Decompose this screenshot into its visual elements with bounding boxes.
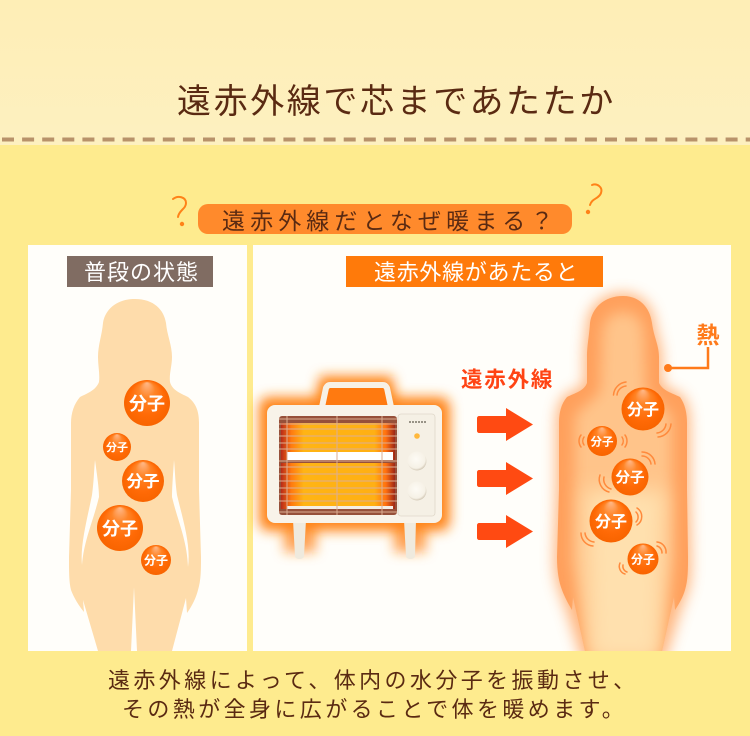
explanation line 2: その熱が全身に広がることで体を暖めます。 — [122, 697, 627, 722]
molecule 5: 分子 — [144, 554, 168, 568]
molecule 3 with vibration: 分子 — [616, 470, 644, 486]
panel heading: normal state — [67, 256, 213, 287]
molecule 2 with vibration — [579, 426, 627, 456]
molecule 5 with vibration: 分子 — [631, 552, 655, 566]
molecule 2: 分子 — [106, 440, 128, 454]
panel heading: under far infrared: 遠赤外線があたると — [374, 260, 578, 285]
heater element grille — [279, 416, 397, 515]
molecule 5 — [141, 545, 171, 575]
panel heading: normal state: 普段の状態 — [84, 260, 199, 285]
molecule 1: 分子 — [129, 394, 165, 414]
question heading text: 遠赤外線だとなぜ暖まる？ — [222, 208, 559, 234]
heat callout — [664, 322, 720, 372]
molecule 4 with vibration — [581, 500, 642, 546]
molecule 2 with vibration: 分子 — [590, 434, 614, 448]
molecule 3 — [122, 460, 164, 502]
heater with glow — [259, 376, 450, 559]
heater body — [267, 405, 442, 523]
molecule 4 — [97, 505, 143, 551]
heater control panel — [398, 414, 435, 516]
panel heading: under far infrared — [346, 256, 603, 287]
heat leader dot — [664, 364, 672, 372]
heat label: 熱 — [696, 322, 720, 348]
title: 遠赤外線で芯まであたたか — [177, 83, 616, 121]
molecule 2 — [103, 433, 131, 461]
molecule 3 with vibration — [599, 452, 655, 496]
panel: under far infrared — [253, 245, 731, 660]
body glow — [557, 296, 688, 660]
arrow 3 — [477, 515, 533, 548]
background: upper cream band — [0, 0, 750, 145]
panel background — [28, 245, 247, 651]
icon: left question mark — [173, 197, 186, 226]
question pill — [198, 204, 572, 234]
panel: normal state — [28, 245, 247, 651]
arrow 2 — [477, 462, 533, 495]
question heading — [198, 204, 572, 234]
dashed stitch divider — [2, 138, 750, 142]
explanation text — [108, 668, 639, 722]
arrow 1 — [477, 408, 533, 441]
heat leader line — [668, 347, 708, 368]
heater handle — [322, 385, 391, 407]
molecule 1 — [124, 380, 170, 426]
label: far infrared: 遠赤外線 — [461, 368, 554, 392]
molecule 4: 分子 — [102, 519, 138, 539]
molecule 4 with vibration: 分子 — [595, 513, 627, 531]
body fill — [557, 296, 688, 651]
panel background — [253, 245, 731, 651]
molecule 3: 分子 — [126, 472, 160, 491]
heater legs — [293, 520, 416, 559]
icon: right question mark — [586, 184, 601, 214]
heater glow — [259, 376, 450, 552]
body silhouette — [69, 299, 201, 651]
molecule 1 with vibration — [614, 382, 671, 437]
molecule 5 with vibration — [619, 542, 666, 574]
molecule 1 with vibration: 分子 — [627, 401, 659, 419]
warmed body — [550, 290, 700, 660]
explanation line 1: 遠赤外線によって、体内の水分子を振動させ、 — [108, 668, 639, 693]
